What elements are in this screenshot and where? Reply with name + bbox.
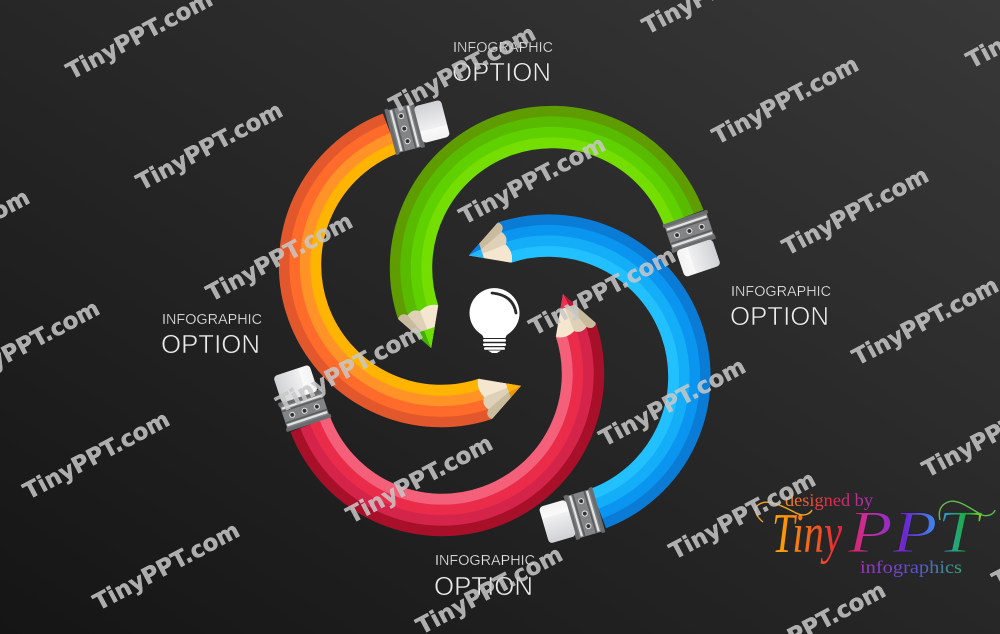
icon: light bulb bbox=[469, 288, 519, 353]
label: top option bbox=[452, 40, 553, 87]
label: top option: INFOGRAPHIC bbox=[453, 40, 553, 56]
watermarks: TinyPPT.com bbox=[778, 162, 933, 261]
pencil: red bbox=[269, 274, 645, 575]
label: right option: OPTION bbox=[730, 301, 829, 331]
watermarks: TinyPPT.com bbox=[595, 353, 750, 452]
pencil: green bbox=[349, 67, 725, 368]
watermarks: TinyPPT.com bbox=[132, 97, 287, 196]
watermarks: TinyPPT.com bbox=[665, 466, 820, 565]
watermarks: TinyPPT.com bbox=[385, 20, 540, 119]
logo: designed by TinyPPT infographics: infographics bbox=[860, 557, 962, 577]
label: left option bbox=[161, 312, 262, 359]
watermarks: TinyPPT.com bbox=[342, 430, 497, 529]
logo: designed by TinyPPT infographics bbox=[755, 490, 995, 577]
label: bottom option: OPTION bbox=[434, 571, 533, 601]
watermarks: TinyPPT.com bbox=[272, 319, 427, 418]
label: top option: OPTION bbox=[452, 57, 551, 87]
label: bottom option: INFOGRAPHIC bbox=[435, 553, 535, 569]
watermarks: TinyPPT.com bbox=[455, 131, 610, 230]
watermarks: TinyPPT.com bbox=[202, 208, 357, 307]
label: right option: INFOGRAPHIC bbox=[731, 284, 831, 300]
pencil: orange bbox=[240, 91, 542, 468]
logo: designed by TinyPPT infographics: PPT bbox=[847, 499, 982, 565]
label: bottom option bbox=[434, 553, 535, 601]
watermarks: TinyPPT.com bbox=[19, 406, 174, 505]
watermarks: TinyPPT.com bbox=[525, 242, 680, 341]
watermarks: TinyPPT.com bbox=[848, 272, 1000, 371]
watermarks: TinyPPT.com bbox=[89, 517, 244, 616]
logo: designed by TinyPPT infographics: Tiny bbox=[772, 503, 842, 565]
pencil: blue bbox=[448, 174, 749, 550]
label: left option: OPTION bbox=[161, 329, 260, 359]
label: left option: INFOGRAPHIC bbox=[162, 312, 262, 328]
watermarks: TinyPPT.com bbox=[708, 51, 863, 150]
label: right option bbox=[730, 284, 831, 331]
logo: designed by TinyPPT infographics: designed by bbox=[785, 490, 873, 510]
